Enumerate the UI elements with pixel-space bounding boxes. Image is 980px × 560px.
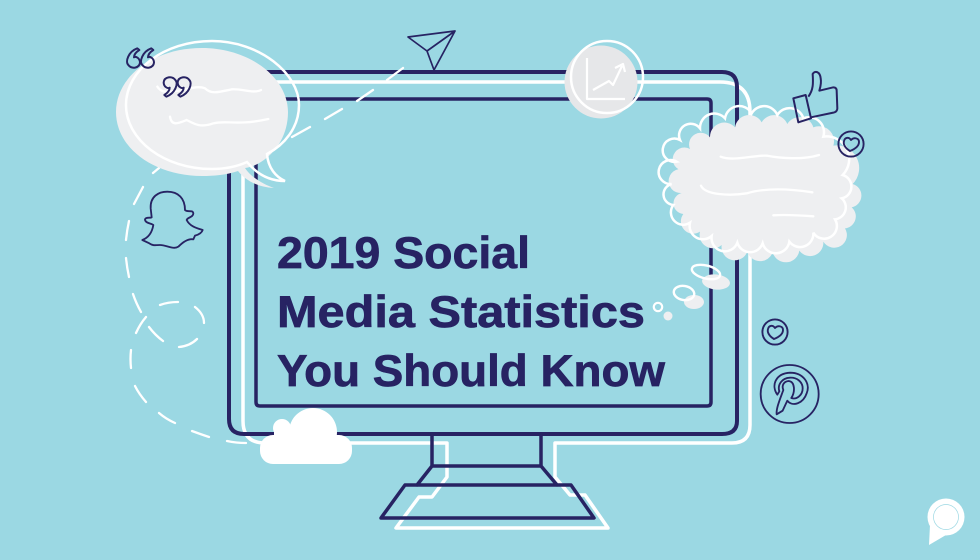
icon: quotation marks: [127, 48, 191, 97]
thought cloud outline: [659, 106, 851, 253]
icon: heart badge top: [838, 131, 864, 157]
thought cloud squiggles: [701, 155, 819, 216]
thought cloud fill: [669, 115, 861, 262]
monitor navy screen: [256, 99, 711, 406]
title: 2019 Social: [277, 229, 530, 278]
monitor white offset outline: [243, 82, 750, 528]
logo: speech mark: [928, 498, 964, 545]
speech bubble outline: [126, 41, 299, 181]
monitor: [229, 72, 750, 528]
icon: paper plane: [408, 31, 455, 70]
thought cloud: [659, 106, 861, 262]
dashed flight path: [126, 68, 403, 443]
monitor navy stand: [381, 434, 594, 518]
monitor navy frame: [229, 72, 737, 434]
icon: heart badge lower: [762, 319, 788, 345]
opening quote: [127, 48, 154, 68]
icon: white cloud: [260, 408, 352, 464]
icon: growth chart circle: [564, 41, 643, 118]
title: [277, 229, 665, 396]
speech bubble fill: [116, 48, 288, 188]
thought bubble trail: [654, 262, 731, 320]
closing quote: [164, 77, 191, 97]
icon: pinterest: [761, 365, 819, 423]
icon: snapchat ghost: [142, 192, 203, 248]
icon: thumbs up: [793, 72, 837, 122]
speech bubble squiggles: [157, 87, 268, 125]
title: Media Statistics: [277, 288, 645, 337]
title: You Should Know: [277, 347, 665, 396]
speech bubble: [116, 41, 299, 188]
